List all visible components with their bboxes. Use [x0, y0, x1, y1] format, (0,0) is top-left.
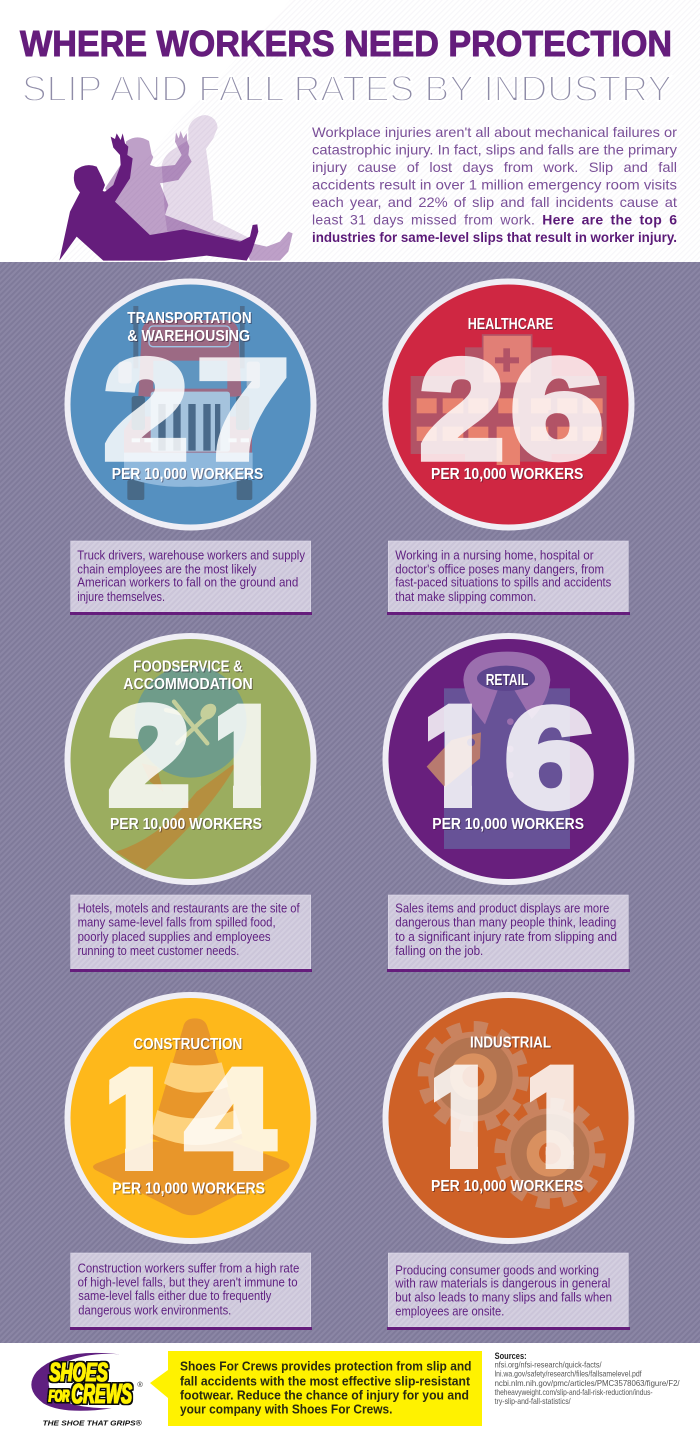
- intro paragraph: least 31 days missed from work. Here are the top 6: [312, 212, 677, 228]
- text card: retail: [387, 895, 630, 972]
- text card: transportation: injure themselves.: [77, 589, 165, 604]
- number: 14: 4: [186, 1040, 274, 1197]
- text card: foodservice: Hotels, motels and restaurants are the site of: [78, 901, 300, 916]
- icon: shirt and price tag: [427, 652, 570, 849]
- callout: speech bubble: fall accidents with the most effective slip-resistant: [180, 1374, 471, 1388]
- text card: industrial: with raw materials is dangerous in general: [394, 1276, 610, 1291]
- category label: INDUSTRIAL: [470, 1035, 551, 1052]
- number: 16: [428, 704, 594, 812]
- circle badge: [68, 636, 314, 882]
- text card: transportation: [70, 541, 312, 615]
- text card: construction: of high-level falls, but they aren't immune to: [78, 1275, 298, 1290]
- intro paragraph: accidents result in over 1 million emergency room visits: [312, 176, 677, 192]
- registered mark: ®: [137, 1380, 143, 1389]
- text card: healthcare: that make slipping common.: [395, 589, 536, 604]
- panel: transportation and warehousing: [68, 282, 314, 528]
- sources: theheavyweight.com/slip-and-fall-risk-reduction/indus-: [495, 1387, 653, 1397]
- panel: retail: [386, 636, 632, 882]
- number: 14: 1: [97, 1040, 175, 1197]
- text card: transportation: American workers to fall on the ground and: [77, 575, 298, 590]
- text card: healthcare: [387, 541, 630, 615]
- icon: traffic cone: [93, 1018, 290, 1215]
- category label: & WAREHOUSING: [127, 328, 250, 345]
- circle badge: [386, 282, 632, 528]
- text card: foodservice: [70, 895, 312, 972]
- category label: RETAIL: [486, 672, 528, 689]
- number: 26: 6: [511, 330, 603, 487]
- icon: hospital: [411, 335, 607, 465]
- text card: transportation: Truck drivers, warehouse workers and supply: [77, 547, 305, 562]
- callout: speech bubble: your company with Shoes For Crews.: [180, 1402, 392, 1416]
- text card: foodservice: many same-level falls from spilled food,: [78, 915, 276, 930]
- number: 21: [108, 702, 261, 808]
- number: 11: [434, 1064, 574, 1169]
- illustration: falling worker silhouettes: [59, 115, 293, 261]
- text card: retail: Sales items and product displays are more: [395, 901, 609, 916]
- text card: transportation: chain employees are the most likely: [77, 561, 257, 576]
- logo wordmark: SHOES: [49, 1357, 108, 1387]
- category label: [123, 659, 253, 693]
- logo wordmark: FOR: [49, 1387, 69, 1406]
- sources: Sources:: [495, 1351, 527, 1361]
- header background: [0, 0, 700, 262]
- intro paragraph: each year, and 22% of slip and fall incidents cause at: [312, 194, 677, 210]
- gear: lower: [501, 1104, 599, 1203]
- text card: construction: same-level falls either due to frequently: [78, 1288, 272, 1303]
- panel: industrial: [386, 995, 632, 1241]
- sources: [495, 1351, 680, 1406]
- number: 21: 2: [108, 677, 190, 834]
- number: 27: [104, 331, 289, 488]
- number: 21: 1: [205, 677, 283, 834]
- intro paragraph: Workplace injuries aren't all about mechanical failures or: [312, 124, 677, 140]
- category label: HEALTHCARE: [468, 316, 553, 333]
- number: 26: 2: [420, 331, 504, 488]
- text card: healthcare: Working in a nursing home, hospital or: [395, 547, 594, 562]
- text card: retail: falling on the job.: [395, 943, 483, 958]
- rate label: PER 10,000 WORKERS: [112, 1180, 265, 1197]
- text card: industrial: but also leads to many slips and falls when: [395, 1290, 612, 1305]
- text card: construction: dangerous work environments.: [78, 1302, 231, 1317]
- number: 16: 1: [416, 677, 494, 834]
- footer background: [0, 1343, 700, 1436]
- rate label: PER 10,000 WORKERS: [431, 1178, 583, 1195]
- text card: foodservice: running to meet customer needs.: [78, 943, 239, 958]
- text card: industrial: [387, 1253, 630, 1330]
- category label: [127, 310, 252, 345]
- silhouette: fallen figure: [59, 133, 258, 261]
- icon: plate, hand and cutlery: [116, 666, 247, 870]
- text card: healthcare: fast-paced situations to spills and accidents: [395, 575, 612, 590]
- rate label: PER 10,000 WORKERS: [112, 466, 263, 483]
- text card: healthcare: doctor's office poses many dangers, from: [395, 561, 604, 576]
- tagline: THE SHOE THAT GRIPS®: [43, 1418, 142, 1427]
- subtitle: SLIP AND FALL RATES BY INDUSTRY: [22, 68, 672, 109]
- panel: construction: [68, 995, 314, 1241]
- number: 14: [109, 1066, 278, 1171]
- text card: industrial: Producing consumer goods and working: [395, 1262, 599, 1277]
- intro paragraph: injury cause of lost days from work. Slip and fall: [312, 159, 677, 175]
- text card: construction: Construction workers suffer from a high rate: [78, 1261, 299, 1276]
- callout: speech bubble: footwear. Reduce the chance of injury for you and: [180, 1388, 469, 1402]
- callout: speech bubble: Shoes For Crews provides protection from slip and: [180, 1360, 472, 1374]
- number: 26: [420, 330, 603, 488]
- gear: upper: [424, 1027, 523, 1126]
- text card: retail: dangerous than many people think, leading: [395, 915, 616, 930]
- number: 11: 1: [518, 1038, 596, 1195]
- logo swoosh: [31, 1353, 120, 1411]
- sources: try-slip-and-fall-statistics/: [495, 1396, 571, 1406]
- category label: TRANSPORTATION: [127, 310, 252, 327]
- circle badge: [386, 636, 632, 882]
- category label: FOODSERVICE &: [133, 659, 243, 676]
- icon: truck: [118, 306, 260, 500]
- text card: construction: [70, 1253, 312, 1330]
- circle badge: [68, 995, 314, 1241]
- sources: nfsi.org/nfsi-research/quick-facts/: [495, 1359, 602, 1369]
- logo: Shoes For Crews: [31, 1353, 143, 1427]
- panel: healthcare: [386, 282, 632, 528]
- rate label: PER 10,000 WORKERS: [432, 816, 584, 833]
- circle badge: [68, 282, 314, 528]
- logo wordmark: [49, 1357, 132, 1409]
- category label: CONSTRUCTION: [133, 1036, 242, 1053]
- sources: ncbi.nlm.nih.gov/pmc/articles/PMC3578063/figure/F2/: [495, 1378, 680, 1388]
- intro paragraph: catastrophic injury. In fact, slips and falls are the primary: [312, 142, 677, 158]
- rate label: PER 10,000 WORKERS: [431, 466, 583, 483]
- number: 11: 1: [422, 1038, 500, 1195]
- text card: retail: to a significant injury rate from slipping and: [395, 929, 617, 944]
- silhouette: standing figure: [162, 115, 253, 248]
- intro paragraph: [312, 124, 677, 245]
- callout: speech bubble: [150, 1351, 482, 1426]
- number: 27: 2: [104, 331, 188, 488]
- panel: foodservice and accommodation: [68, 636, 314, 882]
- icon: gears: [424, 1027, 599, 1203]
- number: 16: 6: [505, 679, 595, 836]
- striped background band: [0, 262, 700, 1343]
- text card: industrial: employees are onsite.: [395, 1304, 504, 1319]
- number: 27: 7: [197, 331, 289, 488]
- rate label: PER 10,000 WORKERS: [110, 816, 262, 833]
- sources: lni.wa.gov/safety/research/files/fallsamelevel.pdf: [495, 1369, 642, 1379]
- silhouette: slipping figure: [105, 131, 293, 261]
- category label: ACCOMMODATION: [123, 676, 253, 693]
- circle badge: [386, 995, 632, 1241]
- title: WHERE WORKERS NEED PROTECTION: [20, 23, 672, 64]
- logo wordmark: CREWS: [71, 1378, 132, 1409]
- text card: foodservice: poorly placed supplies and employees: [78, 929, 271, 944]
- intro paragraph: industries for same-level slips that result in worker injury.: [312, 229, 677, 245]
